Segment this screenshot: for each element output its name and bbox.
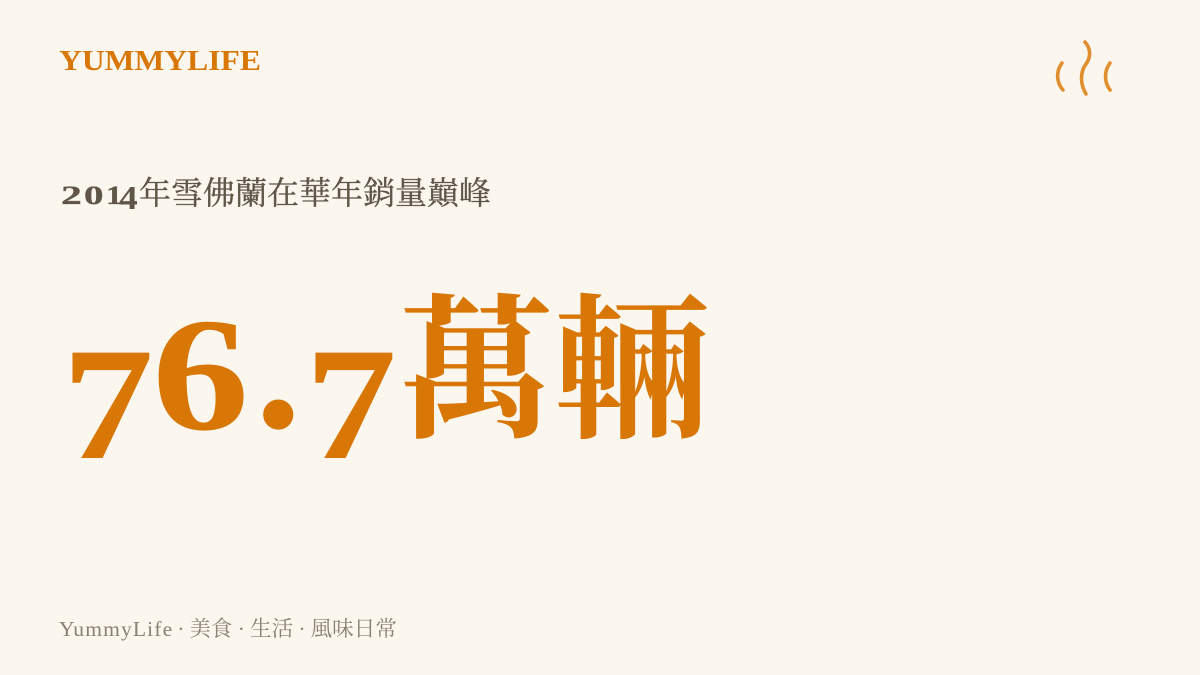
subtitle: 0 xyxy=(84,181,104,210)
footer tagline: YummyLife xyxy=(59,617,173,641)
icon: steam xyxy=(1056,40,1112,96)
footer tagline: · 美食 · 生活 · 風味日常 xyxy=(177,612,397,643)
subtitle: 2 xyxy=(61,181,82,210)
footer tagline xyxy=(59,612,397,643)
brand heading: YUMMYLIFE xyxy=(59,45,261,77)
subtitle: 1 xyxy=(106,181,122,210)
big number: 萬輛 xyxy=(398,245,710,470)
subtitle: 年雪佛蘭在華年銷量巔峰 xyxy=(139,168,491,214)
big number: . xyxy=(255,262,302,468)
big number: 7 xyxy=(305,315,397,493)
big number: 7 xyxy=(62,315,154,493)
subtitle: 4 xyxy=(119,180,138,217)
big number: 6 xyxy=(152,286,249,465)
big number xyxy=(62,245,710,493)
